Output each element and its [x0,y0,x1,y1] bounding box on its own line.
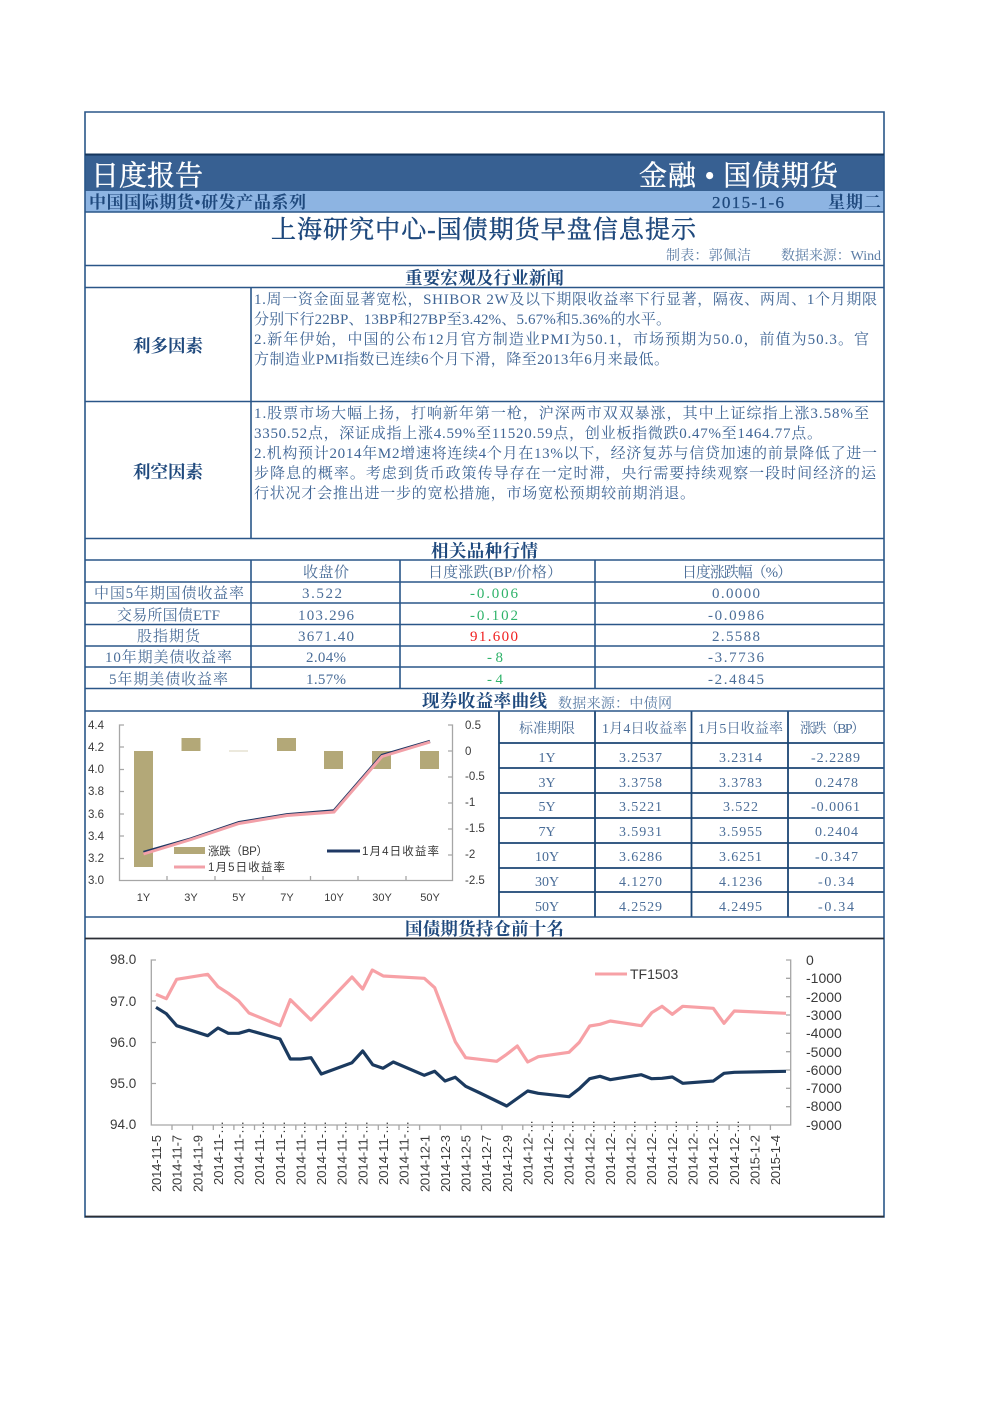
table: yields by maturity: 3.6286 [619,850,662,865]
heading: macro news: 重要宏观及行业新闻 [405,268,564,288]
text block: bearish news: 2.机构预计2014年M2增速将连续4个月在13%以下，经济复苏与信贷加速的前景降低了进一 [254,444,877,462]
right axis labels: -1000 [806,970,842,986]
table: related markets: 0.0000 [712,586,760,602]
date axis labels: 2014-12-… [686,1120,700,1185]
text block: bullish news: 2.新年伊始，中国的公布12月官方制造业PMI为50.1，市场预期为50.0，前值为50.3。官 [254,330,869,348]
date axis labels: 2015-1-4 [768,1135,783,1185]
table: yields by maturity: 4.2495 [719,900,762,915]
table: related markets: 5年期美债收益率 [109,670,228,688]
bars: change in BP [134,738,439,867]
table: yields by maturity: -2.2289 [811,751,860,766]
category labels: 50Y [420,892,440,904]
date axis labels: 2014-12-… [562,1120,577,1185]
category labels: 1Y [137,892,151,904]
table: related markets: 2.04% [306,650,346,666]
left axis labels: 98.0 [110,952,136,967]
panel: bullish factors [133,290,877,368]
text block: bearish news: 行状况才会推出进一步的宽松措施，市场宽松预期较前期消退。 [254,484,695,502]
date axis labels: 2014-12-1 [417,1135,432,1192]
panel: bearish factors [133,404,877,502]
right axis labels [465,720,485,887]
right axis labels: -2000 [806,989,842,1005]
left axis labels [110,952,136,1132]
author and data source: 数据来源：Wind [781,247,881,264]
date axis labels: 2014-11-… [294,1121,308,1185]
report title: 上海研究中心-国债期货早盘信息提示 [271,216,697,244]
date axis labels: 2014-11-9 [190,1135,205,1192]
category labels [137,892,440,904]
date axis labels: 2014-12-… [541,1120,556,1185]
table: related markets: 中国5年期国债收益率 [94,584,244,602]
line: Jan 5 yield [144,742,430,854]
right axis labels: -8000 [806,1098,842,1114]
table: related markets: 3671.40 [298,629,354,645]
right axis labels [806,952,842,1133]
table: yields by maturity: 3.3758 [619,776,662,791]
table: yields by maturity: 10Y [535,850,559,865]
date axis labels: 2014-11-… [376,1121,391,1185]
table: related markets: 股指期货 [137,627,201,645]
author and data source: 制表：郭佩洁 [666,247,751,264]
date axis labels: 2014-11-… [211,1121,226,1185]
table: yields by maturity: 3.2537 [619,751,662,766]
left axis labels: 4.0 [88,764,104,776]
text block: bearish news: 3350.52点，深证成指上涨4.59%至11520.59点，创业板指微跌0.47%至1464.77点。 [254,424,822,442]
header band: 日度报告 [91,160,203,192]
date axis labels: 2014-11-… [335,1121,350,1185]
heading: spot yield curve: 数据来源：中债网 [558,695,672,712]
table: related markets [94,563,792,688]
table: yields by maturity: -0.0061 [811,800,860,815]
table: yields by maturity: 3.5955 [719,825,762,840]
legend [174,844,439,874]
left axis labels: 94.0 [110,1117,136,1132]
header band: 金融 • 国债期货 [639,160,840,192]
table: yields by maturity: 4.1236 [719,875,762,890]
heading: spot yield curve: 现券收益率曲线 [422,691,548,711]
left axis labels: 3.4 [88,831,105,843]
date axis labels: 2014-11-… [355,1121,370,1185]
date axis labels: 2014-12-5 [458,1135,474,1192]
left axis labels: 95.0 [110,1076,136,1091]
date axis labels: 2014-12-… [603,1120,618,1185]
date axis labels: 2014-12-… [644,1120,659,1185]
table: related markets: -8 [487,650,503,666]
right axis labels: -6000 [806,1062,842,1078]
table: yields by maturity: 0.2478 [815,776,858,791]
left axis labels: 97.0 [110,994,136,1009]
text block: bearish news: 1.股票市场大幅上扬，打响新年第一枪，沪深两市双双暴涨，其中上证综指上涨3.58%至 [254,404,869,422]
table: yields by maturity: 1月5日收益率 [698,720,783,737]
table: yields by maturity: -0.347 [815,850,858,865]
right axis labels: 0 [465,746,471,758]
right axis labels: -3000 [806,1007,842,1023]
date axis labels: 2014-12-9 [500,1135,515,1192]
right axis labels: -5000 [806,1044,842,1060]
heading: related markets: 相关品种行情 [431,541,538,561]
table: yields by maturity: 3.6251 [719,850,762,865]
table: related markets: 103.296 [298,608,354,624]
table: related markets: 10年期美债收益率 [105,648,232,666]
left axis labels: 3.2 [88,853,104,865]
table: yields by maturity: -0.34 [818,875,854,890]
text block: bullish news: 1.周一资金面显著宽松，SHIBOR 2W及以下期限收益率下行显著，隔夜、两周、1个月期限 [254,290,877,308]
left axis labels: 3.8 [88,786,104,798]
chart: yield curve [88,720,485,904]
table: related markets: 3.522 [302,586,342,602]
right axis labels: -0.5 [465,771,485,783]
table: yields by maturity: 1月4日收益率 [602,720,687,737]
table: related markets: -0.0986 [708,608,764,624]
date axis labels: 2014-11-… [252,1121,267,1185]
table: yields by maturity: 50Y [535,900,559,915]
table: related markets: -0.006 [470,586,518,602]
left axis labels: 96.0 [110,1035,136,1050]
label: bearish: 利空因素 [133,462,204,482]
date axis labels: 2014-11-… [273,1121,288,1185]
table: yields by maturity: 3Y [538,776,556,791]
date axis labels: 2014-12-… [727,1120,742,1185]
table: related markets: 91.600 [470,629,518,645]
table: yields by maturity: 3.3783 [719,776,762,791]
category labels: 7Y [280,892,294,904]
table: yields by maturity: -0.34 [818,900,854,915]
label: bullish: 利多因素 [133,336,204,356]
date axis labels: 2014-12-7 [479,1135,494,1192]
date axis labels: 2014-11-… [232,1121,247,1185]
legend: 涨跌（BP） [208,844,268,858]
date axis labels: 2014-12-… [520,1120,535,1185]
right axis labels: -2 [465,849,475,861]
legend: TF1503 [595,966,678,982]
date axis labels: 2014-11-… [397,1121,412,1185]
category labels: 3Y [184,892,198,904]
table: yields by maturity: 3.2314 [719,751,762,766]
table: related markets: 收盘价 [303,564,349,581]
category labels: 5Y [232,892,246,904]
heading: spot yield curve [422,691,672,712]
table: yields by maturity: 5Y [538,800,556,815]
sub header band: 中国国际期货•研发产品系列 [89,192,306,212]
category labels: 30Y [372,892,392,904]
category labels: 10Y [324,892,344,904]
text block: bearish news: 步降息的概率。考虑到货币政策传导存在一定时滞，央行需要持续观察一段时间经济的运 [254,464,877,482]
heading: top ten positions: 国债期货持仓前十名 [405,919,564,939]
left axis labels: 3.0 [88,875,104,887]
right axis labels: -7000 [806,1080,842,1096]
date axis labels [149,1120,783,1192]
sub header band: 2015-1-6 [712,193,784,212]
table: yields by maturity: 3.5221 [619,800,662,815]
table: related markets: -0.102 [470,608,518,624]
text block: bullish news [254,290,877,368]
text block: bullish news: 方制造业PMI指数已连续6个月下滑，降至2013年6月来最低。 [254,350,669,368]
table: yields by maturity: 7Y [538,825,556,840]
text block: bullish news: 分别下行22BP、13BP和27BP至3.42%、5.67%和5.36%的水平。 [254,311,671,328]
table: yields by maturity: 30Y [535,875,559,890]
chart: futures positions [110,952,842,1192]
right axis labels: -9000 [806,1117,842,1133]
table: related markets: -2.4845 [708,672,764,688]
left axis labels: 4.4 [88,720,105,732]
line: dark series [156,1007,786,1106]
sub header band [85,191,884,212]
table: related markets: -4 [487,672,504,688]
line: TF1503 [156,970,786,1062]
right axis labels: -4000 [806,1025,842,1041]
left axis labels [88,720,105,887]
left axis labels: 4.2 [88,742,104,754]
right axis labels: -2.5 [465,875,485,887]
table: related markets: 1.57% [306,672,346,688]
table: related markets: -3.7736 [708,650,764,666]
legend: 1月5日收益率 [208,860,285,874]
table: yields by maturity: 0.2404 [815,825,858,840]
date axis labels: 2014-11-5 [149,1135,164,1192]
author and data source [666,247,881,264]
report frame and grid lines [85,112,884,1217]
table: related markets: 日度涨跌幅（%） [682,563,792,581]
right axis labels: 0.5 [465,720,481,732]
table: yields by maturity: 标准期限 [519,720,575,737]
line: Jan 4 yield [144,741,430,852]
right axis labels: -1 [465,797,475,809]
header band [85,155,884,192]
date axis labels: 2014-11-… [314,1121,329,1185]
right axis labels: 0 [806,952,814,968]
table: yields by maturity: 3.5931 [619,825,662,840]
date axis labels: 2014-11-7 [170,1135,185,1192]
date axis labels: 2014-12-… [665,1120,680,1185]
left axis labels: 3.6 [88,809,104,821]
table: yields by maturity: 4.1270 [619,875,662,890]
sub header band: 星期二 [828,193,881,212]
legend: TF1503: TF1503 [630,966,678,982]
date axis labels: 2014-12-… [582,1120,597,1185]
date axis labels: 2015-1-2 [747,1135,762,1185]
table: related markets: 2.5588 [712,629,760,645]
date axis labels: 2014-12-3 [438,1135,453,1192]
right axis labels: -1.5 [465,823,485,835]
table: yields by maturity: 涨跌（BP） [800,720,865,737]
text block: bearish news [254,404,877,502]
table: related markets: 交易所国债ETF [117,606,220,624]
table: yields by maturity [499,711,884,917]
table: yields by maturity: 3.522 [723,800,758,815]
table: yields by maturity: 4.2529 [619,900,662,915]
date axis labels: 2014-12-… [624,1120,639,1185]
legend: 1月4日收益率 [362,844,439,858]
table: yields by maturity: 1Y [538,751,556,766]
table: related markets: 日度涨跌(BP/价格） [428,563,562,581]
date axis labels: 2014-12-… [706,1120,721,1185]
